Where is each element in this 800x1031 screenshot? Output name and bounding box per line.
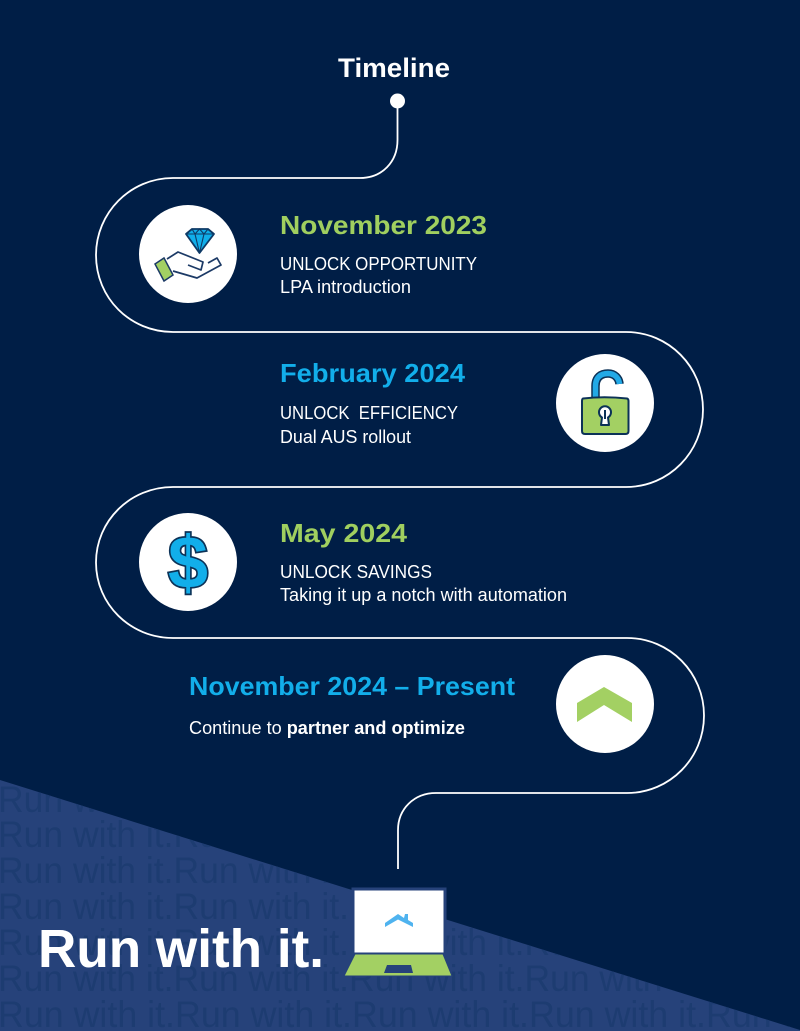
description: UNLOCK OPPORTUNITY [280,254,477,274]
description [280,403,458,447]
background wedge with repeated slogan: Run with it.Run with it.Run with it.Run with it. [0,850,700,891]
date heading: November 2023 [280,210,487,240]
description: LPA introduction [280,277,411,297]
description: Continue to partner and optimize [189,718,465,738]
date heading: February 2024 [280,358,466,388]
description: UNLOCK EFFICIENCY [280,403,458,423]
icon: dollar sign [139,513,237,611]
icon: laptop with house [344,889,452,976]
description: UNLOCK SAVINGS [280,562,432,582]
description [280,254,477,297]
timeline path [96,101,704,869]
milestone: November 2023 [139,205,487,303]
icon: hand with diamond [139,205,237,303]
date heading: May 2024 [280,518,408,548]
icon: dollar sign: $ [168,521,208,604]
milestone: November 2024 – Present [189,655,654,753]
background wedge with repeated slogan: Run with it.Run with it.Run with it.Run with it. [0,814,700,855]
timeline start dot [390,94,405,108]
title: Timeline [338,53,450,83]
background wedge with repeated slogan: Run with it.Run with it.Run with it.Run with it. [0,958,700,999]
description: Dual AUS rollout [280,427,411,447]
icon: upward chevron [556,655,654,753]
milestone: May 2024 [139,513,567,611]
date heading: November 2024 – Present [189,671,515,701]
icon: open padlock [556,354,654,452]
background wedge with repeated slogan [0,779,800,1031]
description: Taking it up a notch with automation [280,585,567,605]
description [280,562,567,605]
background wedge with repeated slogan: Run with it.Run with it.Run with it.Run with it. [0,922,700,963]
milestone: February 2024 [280,354,654,452]
background wedge with repeated slogan: Run with it.Run with it.Run with it.Run with it. [0,779,700,820]
slogan: Run with it. [38,919,324,979]
background wedge with repeated slogan: Run with it.Run with it.Run with it.Run with it. [0,886,700,927]
